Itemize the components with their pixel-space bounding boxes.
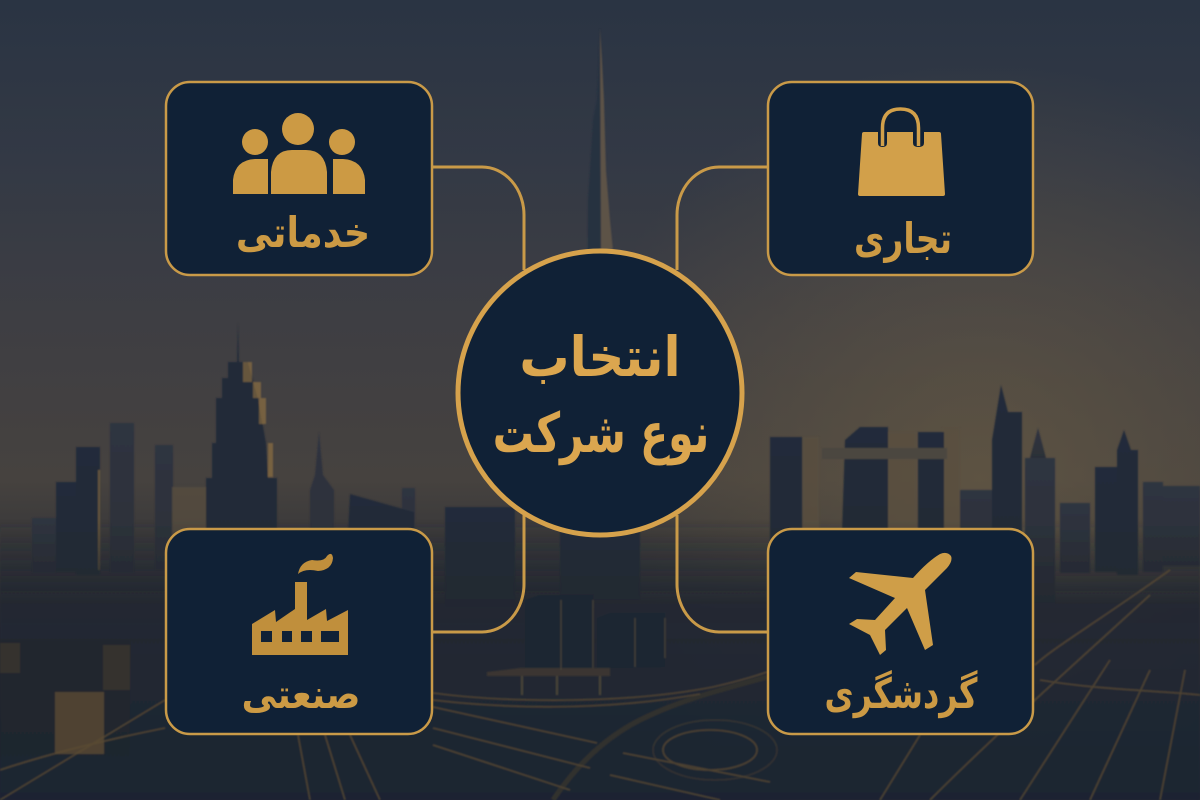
title <box>493 326 709 466</box>
background: highways <box>0 570 1200 800</box>
card: tourism <box>768 529 1033 734</box>
center circle <box>458 251 742 535</box>
card: industrial <box>166 529 432 734</box>
card: services <box>166 82 432 275</box>
label: commercial: تجاری <box>854 214 952 263</box>
title: نوع شرکت <box>493 402 709 466</box>
icon: factory <box>252 554 348 655</box>
connector lines <box>432 167 768 632</box>
icon: shopping bag <box>858 109 945 196</box>
label: industrial: صنعتی <box>242 671 360 718</box>
title: انتخاب <box>519 326 681 390</box>
icon: people <box>233 113 365 194</box>
card: commercial <box>768 82 1033 275</box>
label: services: خدماتی <box>236 210 370 258</box>
label: tourism: گردشگری <box>825 670 978 718</box>
background: lower city blocks <box>0 595 665 760</box>
icon: airplane <box>849 553 952 655</box>
